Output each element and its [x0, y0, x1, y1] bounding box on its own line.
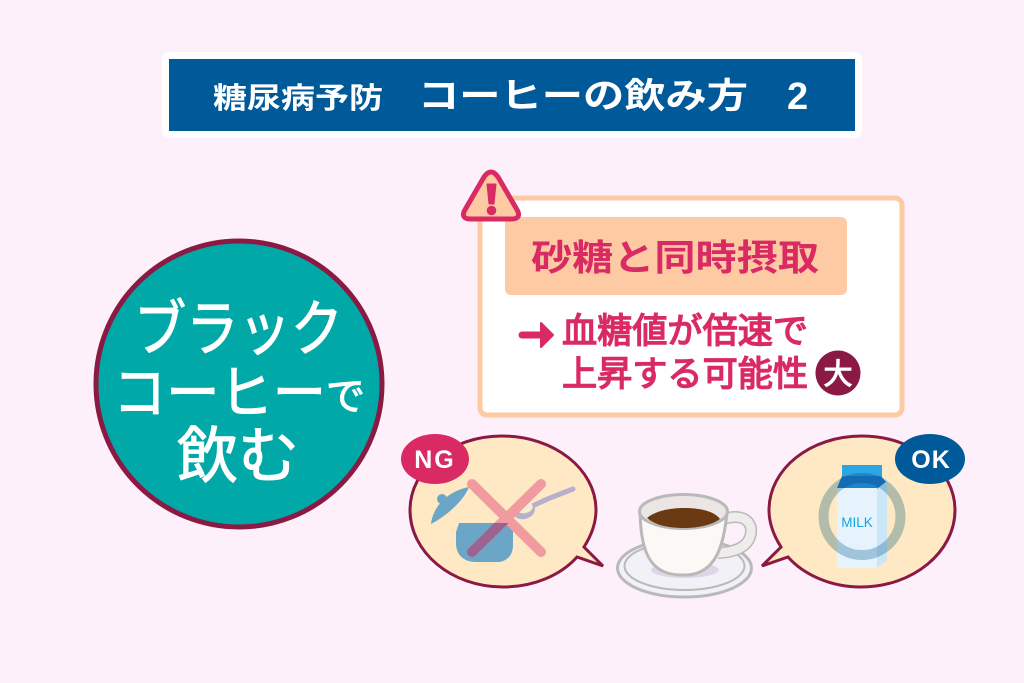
circle: drink black coffee: ブラック [134, 295, 343, 363]
speech bubble: NG [401, 434, 603, 587]
warning text [562, 312, 808, 394]
icon: warning triangle [463, 172, 519, 219]
icon: coffee cup [618, 494, 752, 597]
label: sugar at the same time: 砂糖と同時摂取 [531, 237, 819, 278]
icon: arrow [522, 323, 553, 347]
label: sugar at the same time [505, 217, 847, 295]
circle: drink black coffee: で [326, 376, 365, 419]
title banner: 2 [787, 76, 808, 118]
badge: NG [401, 434, 469, 484]
infographic canvas [94, 52, 965, 598]
badge: NG: NG [414, 446, 456, 474]
warning panel [480, 198, 902, 415]
icon: circle mark [824, 478, 900, 555]
icon: milk carton [837, 465, 887, 568]
warning text: 上昇する可能性 [562, 355, 808, 394]
badge: large: 大 [823, 358, 853, 391]
badge: large [816, 350, 860, 396]
circle: drink black coffee: コーヒー [113, 361, 326, 426]
badge: OK [895, 434, 965, 484]
warning text: 血糖値が倍速で [562, 312, 808, 351]
icon: milk carton: MILK [841, 515, 873, 530]
icon: cross mark [472, 484, 541, 552]
circle: drink black coffee: 飲む [177, 422, 299, 490]
title banner [162, 52, 862, 138]
icon: pot and lid [431, 487, 513, 562]
title banner: 糖尿病予防 [213, 82, 383, 115]
badge: OK: OK [911, 446, 951, 474]
circle: drink black coffee [96, 241, 382, 527]
title banner: コーヒーの飲み方 [418, 77, 748, 116]
speech bubble: OK [762, 434, 965, 587]
icon: spoon [511, 489, 573, 522]
